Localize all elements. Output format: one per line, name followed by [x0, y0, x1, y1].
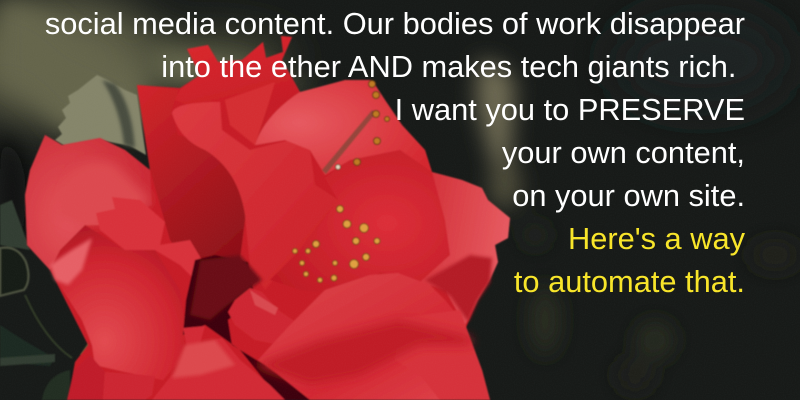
far right ruffled petal	[420, 172, 510, 325]
upper right light petal	[255, 80, 432, 175]
small front petal	[228, 288, 300, 344]
left ruffled petals	[25, 135, 152, 300]
line 4: your own content,	[502, 135, 745, 170]
flower stem and stamen column	[322, 110, 376, 174]
line 2: into the ether AND makes tech giants rich.	[161, 49, 736, 84]
petal base silhouette	[25, 36, 510, 400]
middle wavy fold	[96, 197, 208, 285]
yellow line 2: to automate that.	[514, 264, 745, 299]
right main petal	[270, 150, 450, 296]
upper anthers	[336, 80, 390, 170]
lower right big petal	[258, 273, 490, 400]
leaf behind flower	[55, 75, 146, 155]
central folded petal	[172, 102, 338, 290]
bottom centre petal	[152, 326, 285, 400]
flower	[25, 36, 510, 400]
lower stamen cluster	[292, 206, 380, 282]
line 3: I want you to PRESERVE	[395, 92, 745, 127]
line 1: social media content. Our bodies of work disappear	[45, 6, 745, 41]
line 5: on your own site.	[512, 178, 745, 213]
yellow line 1: Here's a way	[568, 221, 745, 256]
upper centre petals	[175, 36, 300, 145]
left large petal	[50, 225, 186, 380]
lower-left dark foliage and bud	[0, 200, 100, 400]
lower left small petals	[67, 355, 105, 400]
dark flower throat	[183, 255, 312, 400]
central tall dark petal	[137, 85, 250, 290]
